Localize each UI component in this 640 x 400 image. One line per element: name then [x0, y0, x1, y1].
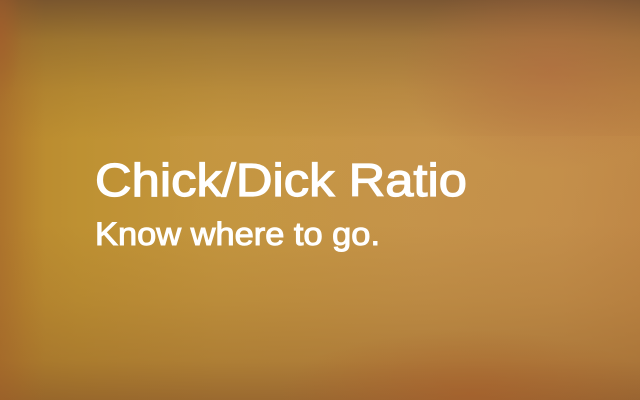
- tagline: Know where to go.: [95, 216, 380, 252]
- title: Chick/Dick Ratio: [95, 154, 467, 206]
